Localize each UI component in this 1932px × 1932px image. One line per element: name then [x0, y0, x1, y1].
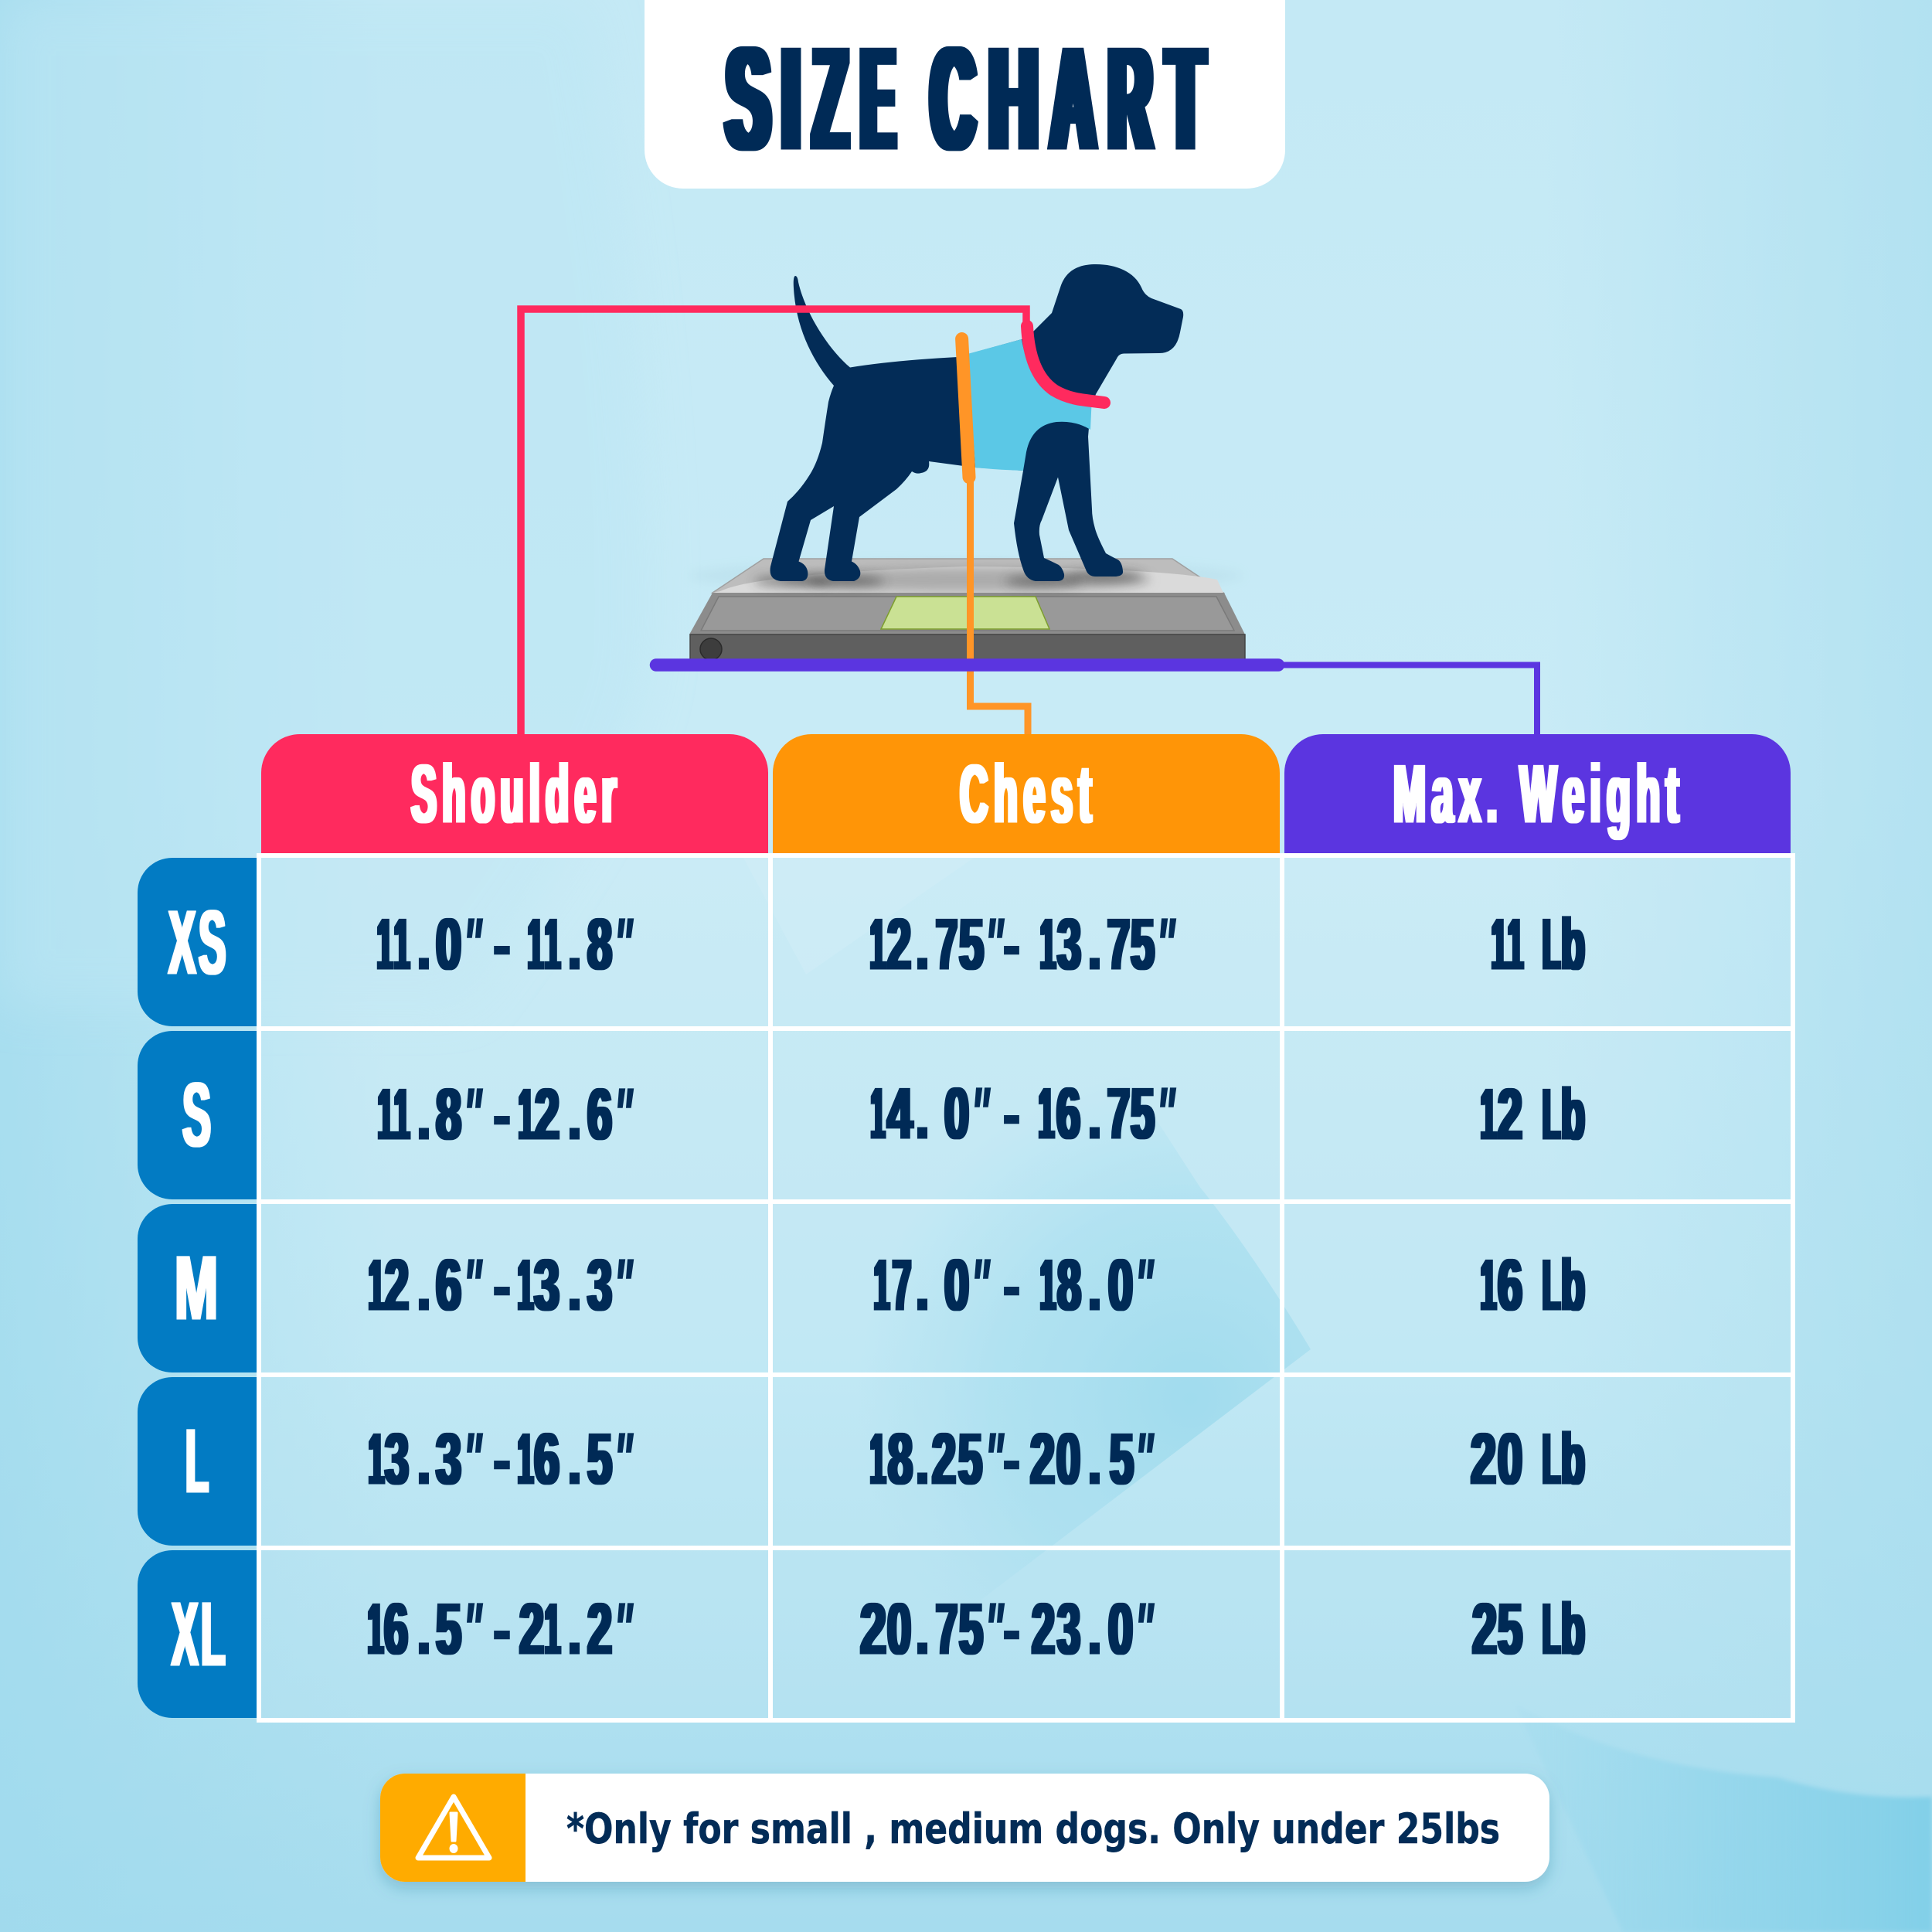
value: S chest: .	[1088, 1073, 1100, 1154]
value: S shoulder: .	[417, 1073, 430, 1155]
value: M shoulder: 3	[534, 1244, 560, 1325]
value: XS weight: 1	[1492, 903, 1507, 985]
value: L chest: .	[917, 1418, 929, 1499]
title text: C	[931, 17, 975, 181]
measure line: chest	[962, 338, 1028, 743]
value: XL chest: "	[985, 1588, 1005, 1669]
value: XL shoulder: -	[492, 1588, 512, 1669]
value: L chest: "	[985, 1418, 1005, 1499]
size tab: M: M	[175, 1237, 218, 1339]
size tab: S	[138, 1031, 257, 1199]
value: L chest: .	[1088, 1418, 1100, 1499]
value: M shoulder: "	[614, 1244, 634, 1325]
value: XS shoulder	[377, 903, 634, 985]
value: L chest: 8	[888, 1418, 913, 1499]
value: L shoulder: 6	[534, 1418, 560, 1499]
value: XL shoulder: 1	[368, 1588, 383, 1669]
value: S shoulder: 1	[519, 1073, 534, 1155]
value: XS shoulder: 1	[528, 903, 543, 985]
value: M chest: .	[917, 1244, 929, 1325]
header: chest: Chest	[960, 747, 1097, 840]
title text: H	[989, 17, 1038, 181]
panel: title	[645, 0, 1285, 189]
value: L chest: "	[1134, 1418, 1155, 1499]
value: S chest: 5	[1131, 1073, 1155, 1154]
value: XL shoulder: .	[417, 1588, 430, 1669]
value: XS shoulder: "	[463, 903, 483, 985]
value: M shoulder: 2	[385, 1244, 409, 1325]
value: XS chest: -	[1002, 903, 1022, 985]
value: XL shoulder: .	[569, 1588, 581, 1669]
value: L chest	[870, 1418, 1155, 1499]
value: XS chest: .	[1088, 903, 1100, 985]
value: XS weight: b	[1561, 903, 1585, 985]
value: XL shoulder: 2	[519, 1588, 544, 1669]
value: S shoulder: -	[492, 1073, 512, 1155]
title text: E	[862, 17, 894, 181]
table body	[257, 853, 1795, 1723]
value: S chest: "	[1156, 1073, 1176, 1154]
value: XL chest: 2	[1032, 1588, 1055, 1669]
value: M weight: 1	[1481, 1244, 1496, 1325]
value: S chest	[871, 1073, 1176, 1154]
value: XL chest: 3	[1057, 1588, 1080, 1669]
value: XL shoulder	[368, 1588, 634, 1669]
value: XL chest: -	[1002, 1588, 1022, 1669]
value: XL chest: 0	[887, 1588, 911, 1669]
value: M chest: 1	[1040, 1244, 1056, 1325]
value: L chest: 2	[932, 1418, 956, 1499]
value: XS shoulder: .	[569, 903, 581, 985]
value: L chest: 5	[1110, 1418, 1134, 1499]
table values: shoulder column	[368, 903, 634, 1669]
value: M shoulder: .	[569, 1244, 581, 1325]
value: L shoulder: -	[492, 1418, 512, 1499]
value: M chest: 8	[1057, 1244, 1081, 1325]
value: XL chest: "	[1134, 1588, 1155, 1669]
notice text: *Only for small , medium dogs. Only under 25lbs	[566, 1804, 1500, 1853]
illustration: dog silhouette	[770, 264, 1183, 581]
value: XS chest: "	[1156, 903, 1176, 985]
value: XL weight: L	[1543, 1588, 1560, 1669]
value: XL weight: 5	[1498, 1588, 1522, 1669]
value: L shoulder: "	[463, 1418, 483, 1499]
value: L shoulder: "	[614, 1418, 634, 1499]
size tab: M	[138, 1204, 257, 1372]
value: XS chest: 1	[870, 903, 886, 985]
value: S weight: L	[1543, 1073, 1560, 1155]
table values: max weight column	[1471, 903, 1585, 1669]
table values: chest column	[860, 903, 1176, 1669]
value: M chest: .	[1088, 1244, 1100, 1325]
value: XS shoulder: -	[492, 903, 512, 985]
value: XS chest: .	[917, 903, 929, 985]
value: L shoulder: 1	[369, 1418, 384, 1499]
value: L chest: 2	[1030, 1418, 1055, 1499]
value: XS chest: 1	[1040, 903, 1056, 985]
value: S chest: 1	[871, 1073, 885, 1154]
value: M shoulder: 3	[587, 1244, 612, 1325]
value: L chest: 0	[1056, 1418, 1080, 1499]
value: XS shoulder: .	[417, 903, 430, 985]
header: chest	[773, 734, 1280, 853]
size tab: XL	[138, 1550, 257, 1718]
value: XL chest: .	[1088, 1588, 1100, 1669]
size tab: L: L	[185, 1410, 209, 1512]
value: XS chest: 7	[1107, 903, 1130, 985]
value: XS shoulder: "	[614, 903, 634, 985]
value: M shoulder	[369, 1244, 634, 1325]
value: M weight: L	[1543, 1244, 1560, 1325]
value: S weight: 1	[1481, 1073, 1496, 1155]
value: XL chest: 5	[959, 1588, 983, 1669]
value: S chest: 0	[944, 1073, 969, 1154]
value: S weight: b	[1561, 1073, 1585, 1155]
value: XS shoulder: 1	[394, 903, 410, 985]
measure line: shoulder	[521, 309, 1104, 743]
value: L chest: -	[1002, 1418, 1022, 1499]
icon: warning triangle	[418, 1797, 489, 1858]
value: XS chest: 3	[1057, 903, 1081, 985]
value: S chest: 6	[1056, 1073, 1080, 1154]
value: S chest: 1	[1039, 1073, 1054, 1154]
value: S shoulder: .	[569, 1073, 581, 1155]
value: L shoulder: .	[569, 1418, 581, 1499]
value: XL chest: .	[917, 1588, 929, 1669]
value: S shoulder: 6	[587, 1073, 612, 1155]
value: XL weight: 2	[1472, 1588, 1497, 1669]
title text: Z	[814, 17, 847, 181]
value: M weight: 6	[1498, 1244, 1522, 1325]
value: XL shoulder: "	[614, 1588, 634, 1669]
value: S shoulder: 1	[378, 1073, 393, 1155]
value: M chest: 0	[1108, 1244, 1133, 1325]
value: S shoulder: 2	[535, 1073, 560, 1155]
value: XS chest: "	[985, 903, 1005, 985]
value: XL shoulder: 1	[545, 1588, 560, 1669]
size tab: S: S	[182, 1064, 211, 1166]
title text: I	[782, 17, 800, 181]
value: XS chest: 5	[959, 903, 984, 985]
value: M shoulder: 1	[369, 1244, 384, 1325]
value: S shoulder: "	[463, 1073, 483, 1155]
illustration: dog vest	[968, 339, 1092, 471]
value: S weight: 2	[1498, 1073, 1522, 1155]
size tab: L	[138, 1377, 257, 1546]
value: M shoulder: .	[417, 1244, 430, 1325]
value: XL chest: 2	[860, 1588, 886, 1669]
value: S shoulder	[378, 1073, 634, 1155]
value: L shoulder	[369, 1418, 634, 1499]
size tab: XL: XL	[172, 1583, 228, 1685]
value: XS chest: 5	[1131, 903, 1155, 985]
value: XS shoulder: 0	[436, 903, 461, 985]
value: S shoulder: 8	[436, 1073, 461, 1155]
value: S shoulder: "	[614, 1073, 634, 1155]
header: shoulder	[261, 734, 768, 853]
value: M chest: 0	[944, 1244, 969, 1325]
illustration: weighing scale	[688, 559, 1245, 661]
value: L shoulder: 5	[587, 1418, 612, 1499]
panel: title: T	[1167, 17, 1204, 181]
measure line: max weight	[656, 665, 1537, 743]
header: max weight	[1284, 734, 1791, 853]
value: M chest: "	[971, 1244, 991, 1325]
value: S chest: 4	[887, 1073, 913, 1154]
value: L shoulder: 1	[518, 1418, 533, 1499]
value: XL shoulder: "	[463, 1588, 483, 1669]
value: S chest: "	[971, 1073, 991, 1154]
value: L chest: 1	[870, 1418, 886, 1499]
value: XL shoulder: 2	[587, 1588, 612, 1669]
value: L weight: L	[1543, 1418, 1560, 1499]
value: M chest	[874, 1244, 1155, 1325]
value: XL weight: b	[1561, 1588, 1585, 1669]
header: shoulder: Shoulder	[411, 747, 622, 840]
value: XL chest: 7	[936, 1588, 957, 1669]
value: S chest: .	[917, 1073, 929, 1154]
callout: notice bar	[380, 1774, 1549, 1882]
value: L shoulder: 3	[436, 1418, 461, 1499]
value: M chest: -	[1002, 1244, 1022, 1325]
value: M shoulder: 6	[436, 1244, 461, 1325]
value: M chest: 1	[874, 1244, 889, 1325]
value: M shoulder: -	[492, 1244, 512, 1325]
value: XL shoulder: 6	[384, 1588, 408, 1669]
value: XL shoulder: 5	[436, 1588, 461, 1669]
value: L chest: 5	[958, 1418, 982, 1499]
value: L shoulder: 3	[385, 1418, 409, 1499]
value: L weight: 0	[1498, 1418, 1522, 1499]
value: M shoulder: "	[463, 1244, 483, 1325]
title text: S	[726, 17, 770, 181]
value: XL chest: 0	[1108, 1588, 1133, 1669]
title text: A	[1051, 17, 1095, 181]
value: XS chest: 7	[936, 903, 957, 985]
value: S chest: -	[1002, 1073, 1022, 1154]
value: XS chest	[870, 903, 1176, 985]
value: XS weight: L	[1543, 903, 1560, 985]
value: M chest: 7	[893, 1244, 911, 1325]
value: S chest: 7	[1107, 1073, 1130, 1154]
value: L weight: b	[1561, 1418, 1585, 1499]
title text: R	[1109, 17, 1151, 181]
size tab: XS: XS	[168, 892, 229, 994]
value: XS shoulder: 1	[377, 903, 393, 985]
value: M chest: "	[1134, 1244, 1155, 1325]
value: XL chest	[860, 1588, 1155, 1669]
value: L weight: 2	[1471, 1418, 1496, 1499]
value: XS shoulder: 1	[545, 903, 560, 985]
value: XS chest: 2	[887, 903, 911, 985]
value: L shoulder: .	[417, 1418, 430, 1499]
value: M weight: b	[1561, 1244, 1585, 1325]
value: XS shoulder: 8	[587, 903, 612, 985]
value: XS weight: 1	[1508, 903, 1523, 985]
value: S shoulder: 1	[394, 1073, 410, 1155]
size tab: XS	[138, 858, 257, 1026]
value: M shoulder: 1	[518, 1244, 533, 1325]
